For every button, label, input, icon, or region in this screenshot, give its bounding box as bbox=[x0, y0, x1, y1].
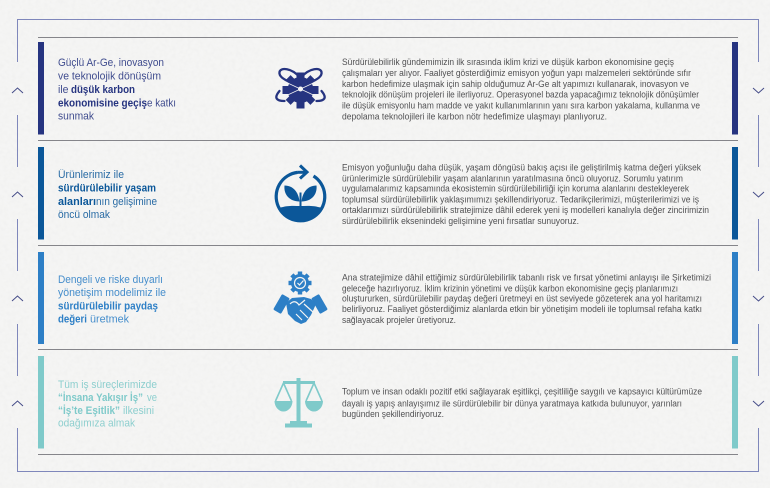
body text: depolama teknolojileri ile karbon nötr hedefimize ulaşmayı planlıyoruz. bbox=[342, 112, 607, 122]
heading: stakeholder value: Dengeli ve riske duyarlı bbox=[58, 274, 163, 286]
icon: balance scale bbox=[274, 378, 323, 428]
body text: sağlayacak projeler üretiyoruz. bbox=[342, 315, 456, 325]
body text: bugünden şekillendiriyoruz. bbox=[342, 409, 444, 419]
heading: decent work and equality: ilkesini bbox=[123, 405, 154, 417]
left accent bar bbox=[38, 42, 44, 134]
panel: stakeholder value bbox=[38, 252, 738, 344]
left accent bar bbox=[38, 147, 44, 240]
body text: teknolojik dönüşüm projeleri ile ilerliyoruz. Operasyonel bazda yapacağımız teknolojik dönüşümler bbox=[342, 90, 699, 100]
right accent bar bbox=[732, 356, 738, 448]
right accent bar bbox=[732, 147, 738, 240]
body text: çalışmaları yer alıyor. Faaliyet gösterdiğimiz emisyon yoğun yapı malzemeleri sektöründe sıfır bbox=[342, 68, 691, 78]
heading: sustainable living: öncü olmak bbox=[58, 209, 110, 221]
heading: low carbon economy: ve teknolojik dönüşüm bbox=[58, 70, 161, 82]
heading: sustainable living bbox=[58, 169, 157, 221]
body text bbox=[342, 162, 709, 226]
body text: sürdürülebilirlik eksenindeki gelişimine yeni fırsatlar sunuyoruz. bbox=[342, 216, 579, 226]
heading: sustainable living: sürdürülebilir yaşam bbox=[58, 182, 156, 194]
heading: stakeholder value: değeri bbox=[58, 314, 87, 326]
right accent bar bbox=[732, 42, 738, 134]
heading: decent work and equality bbox=[58, 379, 157, 430]
body text: ile düşük emisyonlu ham madde ve yakıt kullanımlarının yanı sıra karbon yakalama, kullanma ve bbox=[342, 101, 700, 111]
body text bbox=[342, 272, 711, 325]
heading: low carbon economy: ile bbox=[58, 84, 68, 96]
heading: stakeholder value: üretmek bbox=[90, 314, 129, 326]
body text: ortaklarımızı sürdürülebilirlik stratejimize dâhil ederek yeni iş modelleri kanalıyla değer zincirimizin bbox=[342, 205, 709, 215]
heading: decent work and equality: “İş’te Eşitlik” bbox=[58, 404, 120, 417]
body text: oluştururken, sürdürülebilir paydaş değeri üretmeyi en üst seviyede gözeterek ana yol haritamızı bbox=[342, 294, 702, 304]
body text: dayalı iş yapış anlayışımız ile sürdürülebilir bir dünya yaratmaya katkıda bulunuyor, yarınları bbox=[342, 398, 682, 408]
body text: uygulamalarımız kapsamında ekosistemin sürdürülebilirliği için koruma alanlarını destekleyerek bbox=[342, 184, 690, 194]
body text: Toplum ve insan odaklı pozitif etki sağlayarak eşitlikçi, çeşitliliğe saygılı ve kapsayıcı kültürümüze bbox=[342, 387, 702, 397]
right accent bar bbox=[732, 252, 738, 344]
body text: belirliyoruz. Faaliyet gösterdiğimiz alanlarda etkin bir yönetişim modeli ile toplumsal refaha katkı bbox=[342, 304, 702, 314]
heading: decent work and equality: Tüm iş süreçlerimizde bbox=[58, 379, 157, 391]
heading: low carbon economy: Güçlü Ar-Ge, inovasyon bbox=[58, 57, 164, 69]
heading: sustainable living: alanları bbox=[58, 196, 96, 208]
heading: decent work and equality: ve bbox=[147, 392, 157, 404]
heading: stakeholder value bbox=[58, 274, 166, 326]
panel: sustainable living bbox=[38, 147, 738, 240]
panel: low carbon economy bbox=[38, 42, 738, 134]
left accent bar bbox=[38, 356, 44, 448]
body text: toplumsal sürdürülebilirlik yaklaşımımızı şekillendiriyoruz. Tedarikçilerimizi, müşterilerimizi ve iş bbox=[342, 194, 700, 204]
heading: low carbon economy: ekonomisine geçiş bbox=[58, 98, 147, 110]
icon: gear and handshake bbox=[273, 272, 328, 324]
body text: karbon hedefimize ulaşmak için sahip olduğumuz Ar-Ge alt yapımızı kullanarak, inovasyon ve bbox=[342, 79, 689, 89]
body text: geleceğe hazırlıyoruz. İklim krizinin yönetimi ve düşük karbon ekonomisine geçiş planlarımızı bbox=[342, 283, 678, 293]
heading: sustainable living: nın gelişimine bbox=[96, 196, 157, 208]
heading: low carbon economy: sunmak bbox=[58, 110, 94, 122]
body text: Emisyon yoğunluğu daha düşük, yaşam döngüsü bakış açısı ile geliştirilmiş katma değeri yüksek bbox=[342, 162, 702, 172]
body text bbox=[342, 387, 702, 419]
body text: Sürdürülebilirlik gündemimizin ilk sırasında iklim krizi ve düşük karbon ekonomisine geçiş bbox=[342, 57, 675, 67]
heading: low carbon economy: e katkı bbox=[147, 98, 176, 110]
heading: decent work and equality: odağımıza almak bbox=[58, 418, 135, 430]
panel: decent work and equality bbox=[38, 356, 738, 448]
icon: plant in cycle arrow bbox=[276, 166, 325, 221]
heading: stakeholder value: yönetişim modelimiz ile bbox=[58, 287, 166, 299]
body text: Ana stratejimize dâhil ettiğimiz sürdürülebilirlik tabanlı risk ve fırsat yönetimi anlayışı ile Şirketimizi bbox=[342, 272, 711, 282]
left accent bar bbox=[38, 252, 44, 344]
icon: gear with orbits bbox=[276, 69, 325, 108]
heading: low carbon economy: düşük karbon bbox=[71, 84, 135, 96]
heading: decent work and equality: “İnsana Yakışır İş” bbox=[58, 391, 143, 404]
horizontal rules bbox=[38, 38, 738, 454]
heading: stakeholder value: sürdürülebilir paydaş bbox=[58, 300, 158, 312]
heading: low carbon economy bbox=[58, 57, 176, 122]
body text bbox=[342, 57, 700, 122]
body text: ürünlerimizle sürdürülebilir yaşam alanlarının yaratılmasına öncü oluyoruz. Sorumlu yatırım bbox=[342, 173, 683, 183]
heading: sustainable living: Ürünlerimiz ile bbox=[58, 169, 124, 181]
